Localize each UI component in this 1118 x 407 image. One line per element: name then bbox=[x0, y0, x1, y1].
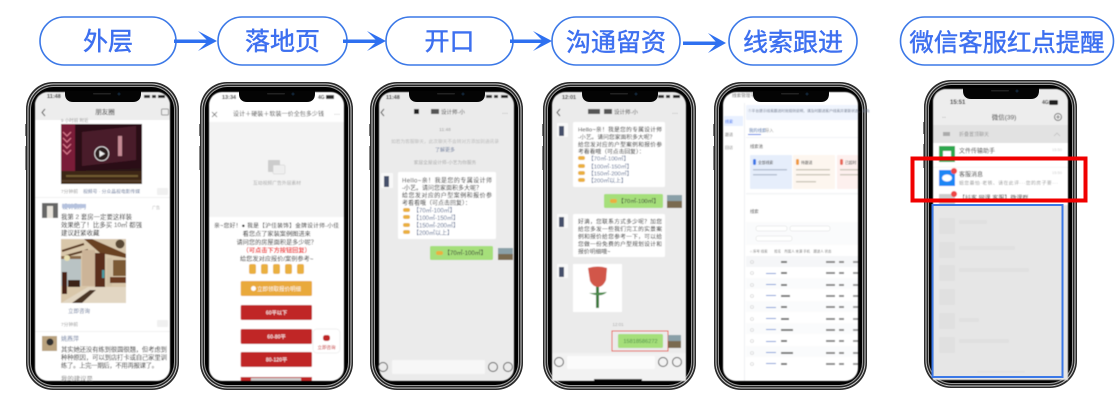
screen content: 落地页: 60-80平 bbox=[267, 334, 286, 340]
screen content: 微信消息列表: 微信(39) bbox=[992, 112, 1016, 122]
screen content: 沟通留资聊天: 12:01 bbox=[562, 95, 576, 101]
screen content: 微信消息列表: ·· bbox=[942, 115, 946, 121]
phone: 落地页 bbox=[199, 82, 353, 390]
screen content: 落地页: ··· bbox=[334, 112, 340, 118]
screen content: 微信消息列表: 折叠置顶聊天 bbox=[959, 131, 989, 138]
phone: 微信客服红点提醒 bbox=[923, 80, 1077, 388]
screen content: 开口聊天: 【200㎡以上】 bbox=[413, 229, 453, 237]
screen content: 开口聊天: ··· bbox=[502, 111, 508, 117]
screen content: 落地页: 立即咨询 bbox=[318, 344, 336, 351]
step: 外层: 外层 bbox=[83, 28, 133, 56]
notch bbox=[65, 91, 141, 102]
screen content: 线索管理后台: 待跟进 bbox=[801, 160, 813, 165]
screen content: 落地页: 请问您的房屋面积是多少呢？ bbox=[236, 238, 317, 246]
screen content: 落地页: 互动视频广告外层素材 bbox=[253, 180, 301, 186]
step: 开口 bbox=[386, 17, 513, 65]
screen content: 开口聊天: 11:48 bbox=[439, 127, 451, 133]
screen content: 线索管理后台 bbox=[723, 92, 870, 381]
screen content: 沟通留资聊天: 例和报价给您参考一下，可以给 bbox=[578, 232, 662, 240]
screen content: 开口聊天: 给您发对应的户型案例和报价参 bbox=[402, 192, 492, 200]
step: 落地页: 落地页 bbox=[245, 28, 320, 56]
screen content: 朋友圈: 11:48 bbox=[47, 94, 61, 100]
screen content: 沟通留资聊天: 考看看哦（可点击回复）： bbox=[578, 148, 645, 156]
step: 线索跟进 bbox=[729, 17, 857, 65]
screen content: 朋友圈: 7分钟前 bbox=[61, 188, 78, 195]
screen content: 微信消息列表: 4G bbox=[1042, 100, 1049, 106]
screen content: 落地页: （可点击下方按钮回复） bbox=[243, 246, 311, 254]
screen content: 线索管理后台: 跟进 bbox=[725, 131, 733, 137]
screen content: 朋友圈: 练了。上完一期后，不用再报课了。 bbox=[61, 360, 158, 370]
screen content: 线索管理后台: 导入 bbox=[765, 128, 774, 133]
arrow: 开口 to 沟通留资 bbox=[510, 31, 552, 51]
icon: rose bbox=[573, 264, 622, 312]
screen content: 微信消息列表: 【抖客 网课 客服】微课群 bbox=[959, 194, 1028, 202]
notch bbox=[963, 88, 1039, 99]
screen content: 沟通留资聊天: 【70㎡-100㎡】 bbox=[618, 197, 659, 205]
notch bbox=[753, 91, 829, 102]
screen content: 开口聊天: 家居全屋设计师-小艺为你服务 bbox=[414, 159, 477, 166]
screen content: 线索管理后台: 已超时 bbox=[845, 160, 857, 165]
screen content: 朋友圈: 我的建议是 bbox=[61, 374, 94, 383]
screen content: 微信消息列表: 文件传输助手 bbox=[959, 147, 995, 155]
screen content: 落地页: 亲~您好！● 我是【沪佳装饰】金牌设计师-小佳 bbox=[214, 222, 339, 230]
screen content: 沟通留资聊天: 【100㎡-150㎡】 bbox=[588, 162, 632, 170]
phone: 沟通留资 bbox=[542, 82, 696, 390]
screen content: 朋友圈: 我第 2 套房一定要这样装 bbox=[61, 212, 133, 221]
screen content: 微信消息列表 bbox=[933, 89, 1068, 380]
screen content: 沟通留资聊天: 您做一份免费的户型规划设计和 bbox=[578, 240, 662, 248]
screen content: 落地页: 80-120平 bbox=[266, 356, 287, 364]
arrow: 外层 to 落地页 bbox=[174, 31, 217, 51]
screen content: 线索管理后台: 线索 bbox=[725, 118, 733, 124]
flow header bbox=[40, 17, 1114, 65]
screen content: 开口聊天: -小艺。请问您家面积多大呢？ bbox=[402, 184, 482, 192]
screen content: 沟通留资聊天: 15818586272 bbox=[623, 339, 658, 345]
highlight: red box around 客服消息 bbox=[912, 158, 1086, 200]
screen content: 开口聊天: 【70㎡-100㎡】 bbox=[444, 249, 487, 257]
screen content: 沟通留资聊天: 给您多发一些我们完工的实景案 bbox=[578, 225, 662, 233]
screen content: 开口聊天: Hello~亲！我是您的专属设计师 bbox=[402, 176, 492, 184]
screen content: 线索管理后台: 回访 bbox=[725, 144, 733, 150]
screen content: 落地页: 60平以下 bbox=[266, 310, 287, 316]
step: 开口: 开口 bbox=[424, 28, 475, 56]
screen content: 沟通留资聊天: 报价明细哦~ bbox=[578, 248, 611, 256]
screen content: 线索管理后台: 线索池 bbox=[750, 143, 764, 149]
screen content: 开口聊天: 了解更多 bbox=[435, 146, 455, 154]
video thumbnail bbox=[61, 124, 142, 184]
screen content: 朋友圈: 视频号 · 分众晶视电影传媒 bbox=[83, 188, 140, 195]
screen content: 沟通留资聊天: 设计师-小 bbox=[614, 108, 638, 116]
screen content: 沟通留资聊天: ··· bbox=[672, 111, 678, 117]
screen content: 朋友圈: 9 小时前 附近 bbox=[61, 117, 89, 124]
notch bbox=[239, 91, 315, 102]
notch bbox=[409, 91, 485, 102]
screen content: 朋友圈: 效果绝了！比多买 10㎡ 都强 bbox=[61, 220, 143, 229]
screen content: 朋友圈: 其实她还没有练到很圆很翘，但考虑到 bbox=[61, 344, 167, 354]
screen content: 落地页: 立即领取报价明细 bbox=[257, 285, 301, 293]
step: 沟通留资: 沟通留资 bbox=[566, 29, 666, 57]
interior photo bbox=[61, 239, 126, 303]
screen content: 微信消息列表: 15:50 bbox=[1052, 147, 1063, 152]
notch bbox=[582, 91, 658, 102]
screen content: 线索管理后台: 全部线索 bbox=[758, 160, 773, 165]
screen content: 朋友圈: 姚燕萍 bbox=[61, 335, 79, 343]
screen content: 沟通留资聊天: 【70㎡-100㎡】 bbox=[588, 154, 629, 162]
screen content: 开口聊天: 如若为客服聊天，此次聊天不会转对方添加到通讯录 bbox=[391, 138, 499, 145]
screen content: 朋友圈: 立即咨询 bbox=[68, 307, 91, 315]
screen content: 沟通留资聊天: 好滴，您联系方式多少呢？加您 bbox=[578, 218, 662, 226]
screen content: 微信消息列表: 客服消息 bbox=[959, 170, 983, 178]
phone: 朋友圈 外层 bbox=[25, 82, 179, 390]
screen content: 沟通留资聊天: Hello~亲！我是您的专属设计师 bbox=[578, 126, 662, 134]
step: 微信客服红点提醒 bbox=[900, 17, 1114, 65]
screen content: 朋友圈: 种种原因，可以到店打卡或自己家里训 bbox=[61, 352, 167, 362]
step: 落地页 bbox=[218, 17, 347, 65]
screen content: 沟通留资聊天: 【150㎡-200㎡】 bbox=[588, 170, 632, 178]
screen content: 开口聊天 bbox=[378, 92, 514, 381]
screen content: 沟通留资聊天: 12:01 bbox=[612, 322, 624, 327]
screen content: 开口聊天: 11:48 bbox=[386, 95, 400, 101]
screen content: 朋友圈: 建议赶紧收藏 bbox=[61, 228, 100, 237]
screen content: 落地页 bbox=[209, 92, 344, 381]
phone: 线索跟进 bbox=[713, 82, 870, 390]
screen content: 落地页: 设计＋硬装＋软装一价全包多少钱 bbox=[233, 110, 324, 118]
step: 线索跟进: 线索跟进 bbox=[743, 29, 843, 57]
screen content: 开口聊天: 【100㎡-150㎡】 bbox=[413, 214, 459, 222]
phone: 开口 bbox=[369, 82, 523, 390]
screen content: 朋友圈: 朋友圈 bbox=[95, 107, 115, 116]
screen content: 线索管理后台: 线索 bbox=[750, 208, 759, 214]
step: 沟通留资 bbox=[552, 17, 680, 65]
arrow: 落地页 to 开口 bbox=[343, 31, 386, 51]
screen content: 开口聊天: 考看看哦（可点击回复）： bbox=[402, 199, 471, 207]
screen content: 开口聊天: 设计师-小 bbox=[441, 108, 465, 116]
screen content: 落地页: 给您发对应报价/案例参考~ bbox=[240, 255, 314, 263]
screen content: 沟通留资聊天: 【200㎡以上】 bbox=[588, 176, 627, 184]
screen content: 落地页: 4G bbox=[318, 95, 325, 101]
screen content: 线索管理后台: ○ 序号 线索 姓名 所属人 来源 手机 跟进人 状态 bbox=[750, 248, 832, 254]
icon: 客服消息 bbox=[939, 168, 957, 186]
screen content: 朋友圈: 7分钟前 bbox=[61, 321, 78, 328]
step: 微信客服红点提醒: 微信客服红点提醒 bbox=[909, 30, 1105, 57]
highlight: blue mask box bbox=[932, 205, 1062, 377]
screen content: 微信消息列表: 姐您最怕·老铁、请在此评···您的房子要··· bbox=[959, 180, 1058, 186]
screen content: 微信消息列表: 15:51 bbox=[950, 100, 966, 106]
icon: 文件传输助手 bbox=[939, 146, 955, 162]
screen content: 沟通留资聊天: 给您发对应的户型案例和报价参 bbox=[578, 140, 662, 148]
screen content: 线索管理后台: 我的线索 bbox=[749, 127, 767, 134]
screen content: 开口聊天: 【70㎡-100㎡】 bbox=[413, 206, 456, 214]
screen content: 线索管理后台: ①平台提示线索跟进时效规则说明，请及时跟进客户线索并更新状态，避免 bbox=[748, 108, 870, 113]
screen content: 微信消息列表: 15:50 bbox=[1052, 170, 1063, 175]
faded chat list bbox=[939, 218, 1029, 372]
screen content: 沟通留资聊天: -小艺。请问您家面积多大呢？ bbox=[578, 133, 655, 141]
screen content: 开口聊天: 【150㎡-200㎡】 bbox=[413, 222, 459, 230]
step: 外层 bbox=[40, 17, 176, 65]
screen content: 沟通留资聊天 bbox=[552, 92, 686, 381]
screen content: 朋友圈: 设计顾问 bbox=[62, 203, 86, 211]
screen content: 朋友圈 bbox=[35, 92, 170, 383]
screen content: 落地页: 13:34 bbox=[222, 95, 237, 101]
arrow: 沟通留资 to 线索跟进 bbox=[683, 33, 726, 53]
screen content: 落地页: 看您点了家装案例图进来 bbox=[243, 230, 311, 238]
screen content: 线索管理后台: 线索管理平台 bbox=[732, 92, 760, 99]
screen content: 朋友圈: 广告 bbox=[152, 204, 160, 210]
